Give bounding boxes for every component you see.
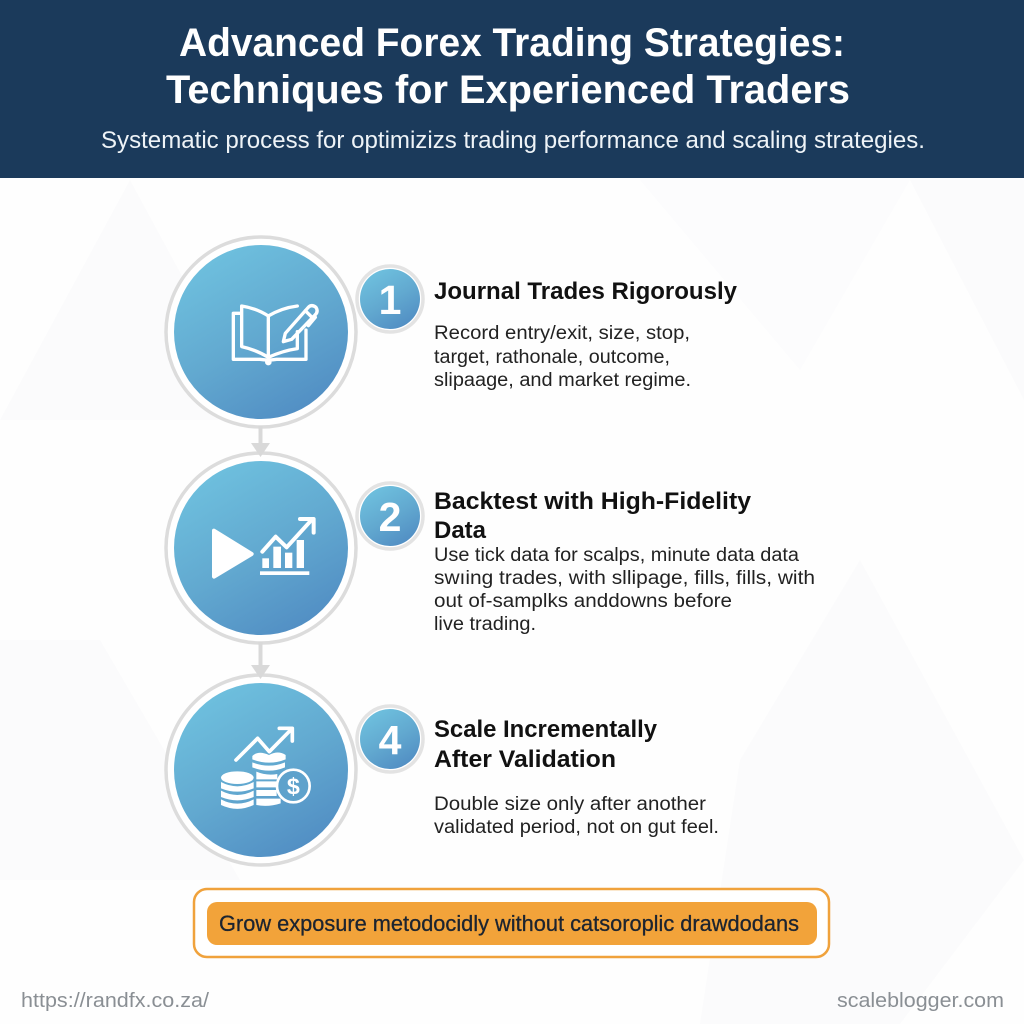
source url: https://randfx.co.za/ [21, 990, 209, 1012]
arrow: step 1 to step 2 [251, 426, 270, 457]
step 3: description [434, 794, 719, 838]
step 2: description: Use tick data for scalps, minute data data [434, 545, 799, 566]
callout [194, 889, 829, 957]
step 1: description: slipaage, and market regime. [434, 370, 691, 391]
step 3: heading: After Validation [434, 746, 616, 773]
step 2: number badge: 2 [379, 494, 401, 540]
title [166, 21, 850, 112]
title: Techniques for Experienced Traders [166, 68, 850, 112]
step 3: description: validated period, not on gut feel. [434, 817, 719, 838]
step 1: description: target, rathonale, outcome, [434, 347, 670, 368]
step 2: backtest circle [166, 453, 356, 643]
step 3: number badge: 4 [379, 717, 402, 763]
callout: Grow exposure metodocidly without catsoroplic drawdodans [219, 911, 799, 936]
step 2: heading: Data [434, 517, 487, 544]
step 2: description [434, 545, 815, 635]
step 3: heading: Scale Incrementally [434, 716, 658, 743]
header banner [0, 0, 1024, 178]
icon: coin stacks, trend arrow and dollar coin [221, 728, 310, 809]
step 2: heading: Backtest with High-Fidelity [434, 488, 752, 515]
step 2: description: out of-samplks anddowns before [434, 591, 732, 612]
arrow: step 2 to step 3 [251, 642, 270, 679]
icon: open book and pencil [233, 306, 317, 365]
step 2: heading [434, 488, 752, 544]
step 3: description: Double size only after another [434, 794, 707, 815]
step 1: journal circle [166, 237, 356, 427]
icon: coin stacks, trend arrow and dollar coin: $ [287, 773, 300, 799]
brand credit: scaleblogger.com [837, 990, 1004, 1012]
step 3: number badge [357, 706, 423, 772]
icon: play button and rising chart [214, 519, 314, 577]
subtitle: Systematic process for optimizizs trading performance and scaling strategies. [101, 127, 925, 154]
title: Advanced Forex Trading Strategies: [179, 21, 845, 65]
step 2: number badge [357, 483, 423, 549]
step 2: description: live trading. [434, 614, 536, 635]
step 1: number badge [357, 266, 423, 332]
step 1: number badge: 1 [379, 277, 401, 323]
step 1: heading: Journal Trades Rigorously [434, 278, 738, 305]
step 2: description: swıing trades, with sllipage, fills, fills, with [434, 568, 815, 589]
step 1: description [434, 323, 691, 391]
step 3: scaling circle [166, 675, 356, 865]
step 1: description: Record entry/exit, size, stop, [434, 323, 690, 344]
step 3: heading [434, 716, 658, 773]
